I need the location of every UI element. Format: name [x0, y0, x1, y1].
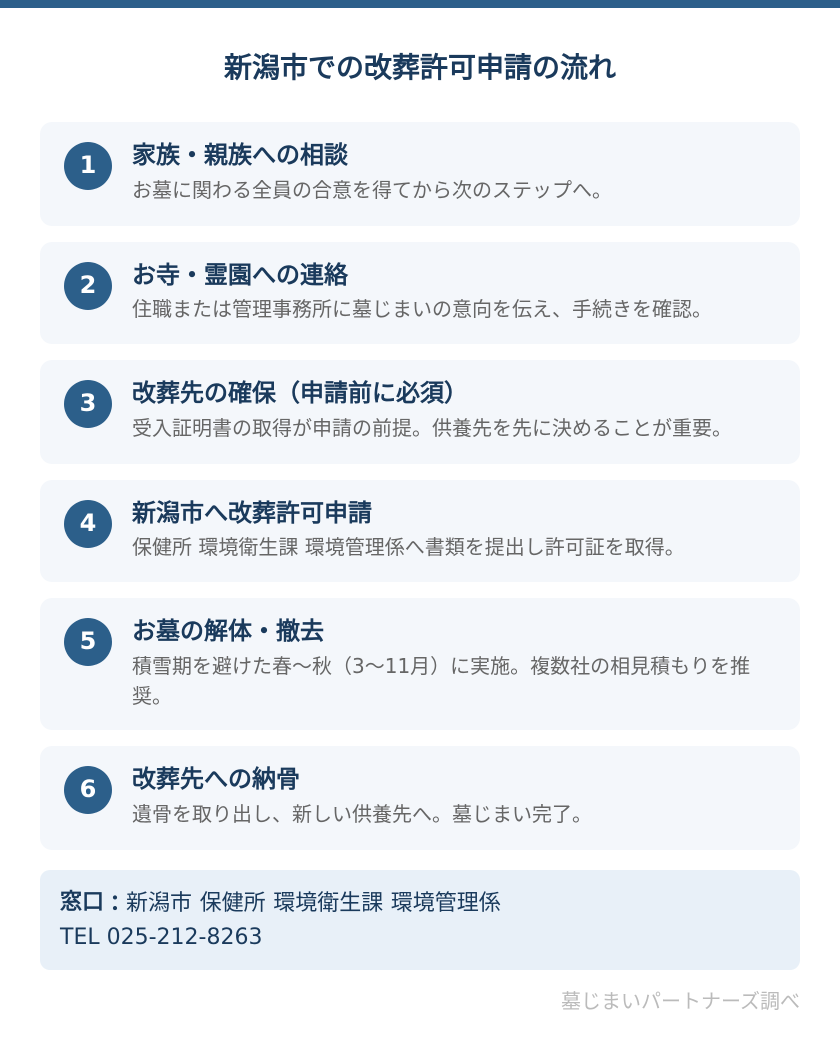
step 3 description: 受入証明書の取得が申請の前提。供養先を先に決めることが重要。 [132, 416, 732, 440]
panel: step 6 [40, 746, 800, 850]
step number 5: 5 [80, 627, 96, 655]
step number 1 [64, 142, 112, 190]
step 4 description: 保健所 環境衛生課 環境管理係へ書類を提出し許可証を取得。 [132, 535, 685, 559]
step 5 heading: お墓の解体・撤去 [132, 611, 324, 646]
panel: step 3 [40, 360, 800, 464]
step number 5 [64, 618, 112, 666]
step number 6: 6 [80, 775, 96, 803]
step number 6 [64, 766, 112, 814]
step 2 heading: お寺・霊園への連絡 [132, 255, 348, 290]
panel: contact [40, 870, 800, 970]
title: 新潟市での改葬許可申請の流れ [224, 51, 616, 84]
step 3 heading: 改葬先の確保（申請前に必須） [132, 379, 468, 407]
panel: step 1 [40, 122, 800, 226]
top bar [0, 0, 840, 8]
step number 3: 3 [80, 389, 96, 417]
step 5 description: 積雪期を避けた春～秋（3～11月）に実施。複数社の相見積もりを推奨。 [132, 654, 750, 708]
step number 4 [64, 500, 112, 548]
panel: step 5 [40, 598, 800, 730]
step 1 heading: 家族・親族への相談 [132, 135, 348, 170]
step number 1: 1 [80, 151, 96, 179]
step number 2 [64, 262, 112, 310]
step 6 description: 遺骨を取り出し、新しい供養先へ。墓じまい完了。 [132, 802, 592, 826]
step 6 heading: 改葬先への納骨 [132, 765, 300, 793]
step number 4: 4 [80, 509, 96, 537]
panel: step 2 [40, 242, 800, 344]
panel: contact: 窓口：新潟市 保健所 環境衛生課 環境管理係 [60, 886, 501, 918]
step 4 heading: 新潟市へ改葬許可申請 [132, 499, 372, 527]
step 1 description: お墓に関わる全員の合意を得てから次のステップへ。 [132, 178, 612, 202]
panel: step 4 [40, 480, 800, 582]
panel: contact: TEL 025-212-8263 [60, 925, 262, 950]
step 2 description: 住職または管理事務所に墓じまいの意向を伝え、手続きを確認。 [132, 297, 712, 321]
step number 2: 2 [80, 271, 96, 299]
step number 3 [64, 380, 112, 428]
source note: 墓じまいパートナーズ調べ [561, 989, 800, 1013]
